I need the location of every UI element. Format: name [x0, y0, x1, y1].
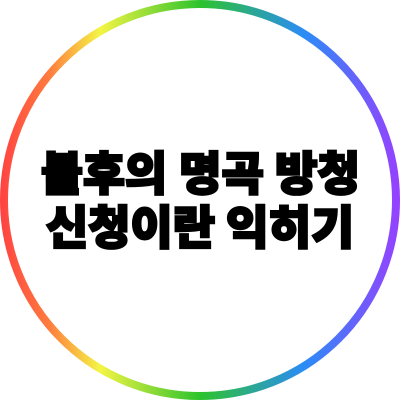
title line 2: 신청이란 [46, 192, 215, 258]
title line 2: 익히기 [226, 192, 354, 258]
title line 1: 방청 [275, 138, 360, 204]
title line 1: 명곡 [179, 138, 264, 204]
title line 2 [46, 192, 354, 258]
title [41, 138, 360, 258]
title line 1: 불후의 [41, 138, 167, 204]
title line 1 [41, 138, 360, 204]
